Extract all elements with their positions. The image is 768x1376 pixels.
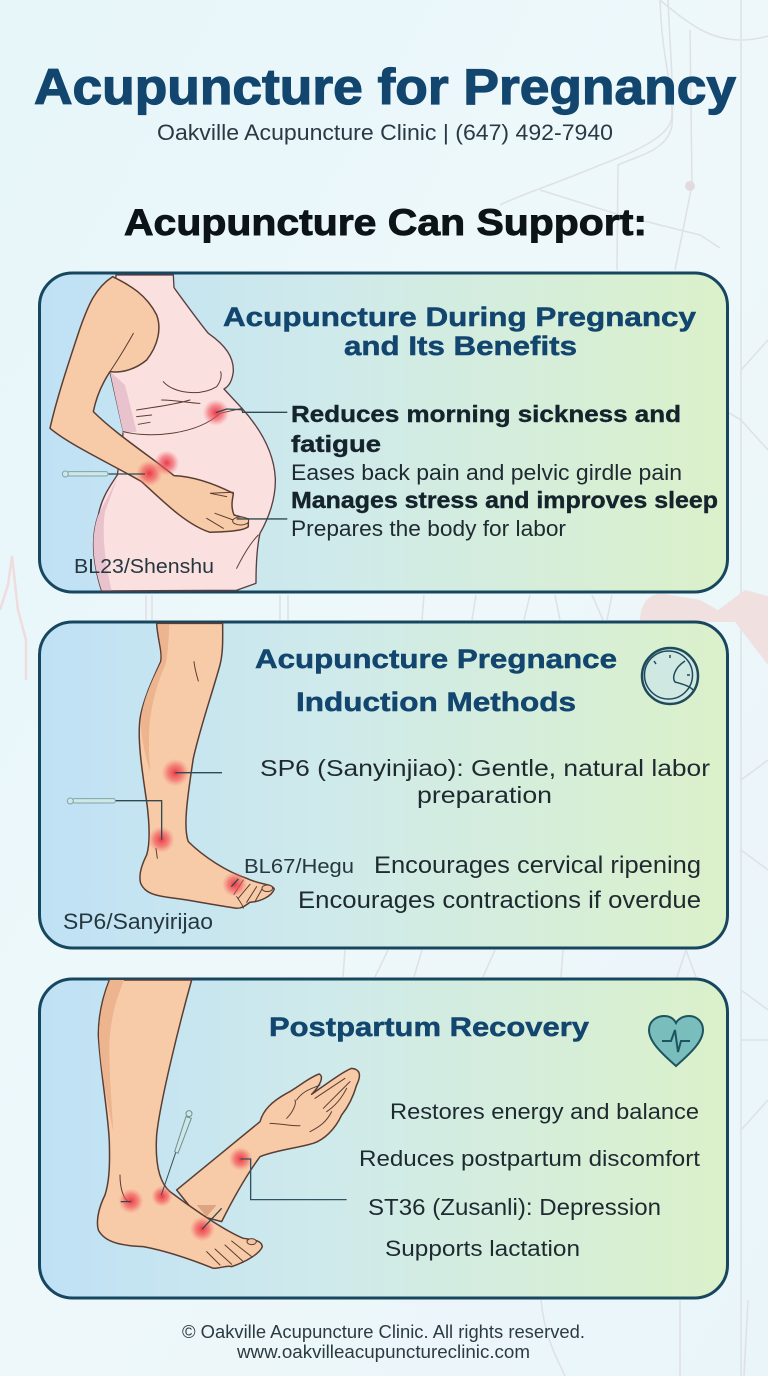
background heart — [640, 590, 768, 665]
leg and foot — [97, 980, 262, 1268]
icon: heart with pulse — [649, 1016, 703, 1066]
benefit: stress and sleep: Manages stress and improves sleep — [291, 487, 718, 513]
method: SP6: SP6 (Sanyinjiao): Gentle, natural labor — [260, 755, 710, 781]
leader lines — [241, 1159, 347, 1200]
leader lines — [108, 409, 287, 519]
section heading: Acupuncture Can Support: — [124, 202, 647, 243]
heading line two: Induction Methods — [296, 687, 576, 717]
benefit: labor preparation: Prepares the body for labor — [291, 516, 566, 541]
heading: Acupuncture Pregnance — [255, 644, 617, 674]
benefit: back pain: Eases back pain and pelvic girdle pain — [291, 460, 682, 485]
acupoint: foot — [222, 872, 247, 897]
point label: BL67: BL67/Hegu — [244, 856, 354, 878]
acupoint: ankle — [151, 1186, 173, 1207]
panel: postpartum recovery — [40, 979, 728, 1298]
acupoint: belly — [203, 399, 229, 426]
illustration: leg and arm — [97, 980, 359, 1268]
footer: © Oakville Acupuncture Clinic. All rights reserved. — [182, 1322, 585, 1342]
needle — [62, 471, 108, 477]
acupoint: shin — [161, 759, 189, 787]
benefit: lactation: Supports lactation — [385, 1236, 580, 1261]
footer: www.oakvilleacupunctureclinic.com — [236, 1342, 530, 1362]
illustration: pregnant torso — [50, 275, 287, 591]
acupoint: heel — [118, 1188, 144, 1214]
point label: SP6: SP6/Sanyirijao — [63, 909, 213, 934]
heading: Postpartum Recovery — [269, 1012, 589, 1042]
benefit: ST36: ST36 (Zusanli): Depression — [368, 1194, 661, 1220]
title: Acupuncture for Pregnancy — [34, 59, 736, 115]
illustration: lower leg — [67, 623, 274, 908]
acupoint: lower back — [154, 450, 179, 476]
arm and hand — [177, 1068, 359, 1222]
heading: Acupuncture During Pregnancy — [223, 302, 696, 332]
acupoint: wrist — [136, 460, 163, 487]
footer — [182, 1322, 585, 1362]
method: contractions: Encourages contractions if overdue — [298, 887, 701, 914]
heading line two: and Its Benefits — [344, 331, 577, 361]
benefit: fatigue: fatigue — [291, 431, 381, 457]
acupoint: ankle — [148, 826, 175, 853]
acupoint: forearm — [229, 1147, 253, 1171]
panel: during pregnancy — [40, 273, 728, 592]
needle — [67, 798, 115, 804]
background heartbeat line — [0, 556, 26, 680]
panel: induction methods — [40, 622, 728, 948]
leader lines — [113, 773, 238, 887]
benefit: morning sickness: Reduces morning sickness and — [291, 401, 681, 427]
subtitle: Oakville Acupuncture Clinic | (647) 492-7940 — [157, 120, 613, 145]
icon: clock — [642, 648, 698, 704]
method: cervical ripening: Encourages cervical ripening — [374, 852, 701, 879]
method: SP6 continued: preparation — [417, 782, 552, 808]
needle — [161, 1111, 192, 1195]
benefit: energy: Restores energy and balance — [390, 1099, 699, 1124]
benefit: discomfort: Reduces postpartum discomfort — [359, 1146, 700, 1171]
point label: BL23/Shenshu — [74, 556, 214, 578]
acupoint: foot — [190, 1216, 215, 1242]
